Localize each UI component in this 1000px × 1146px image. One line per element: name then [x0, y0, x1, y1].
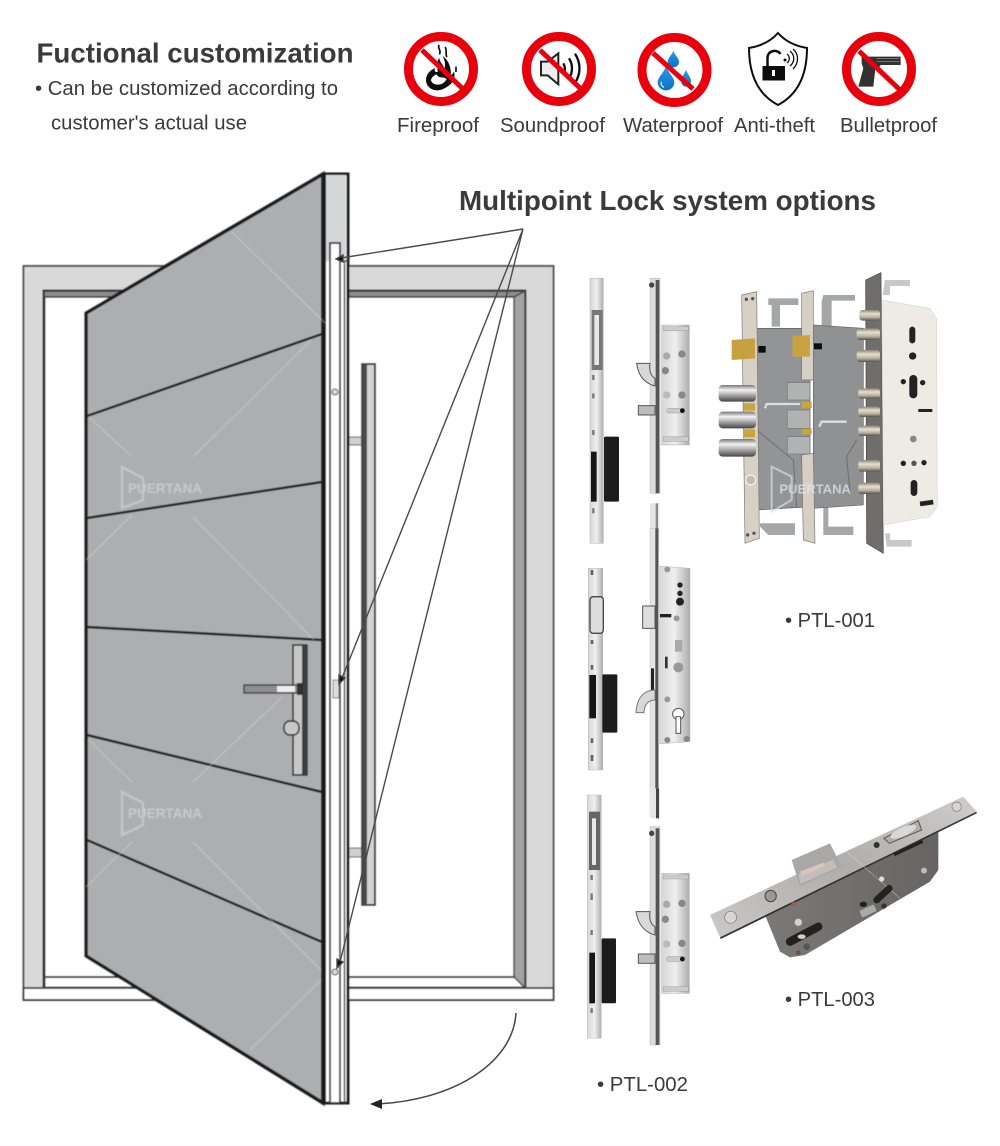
- case cut-outs: [790, 840, 927, 955]
- watermark: PUERTANA: [128, 805, 202, 821]
- latch bolt: [792, 843, 842, 887]
- icon: soundproof: [526, 36, 592, 102]
- forend plate: [710, 797, 977, 939]
- door frame: [24, 266, 554, 1000]
- label: PTL-003: • PTL-003: [785, 989, 875, 1011]
- lock PTL-002 mechanism A: [637, 278, 689, 550]
- lock PTL-003 photo: [710, 797, 977, 957]
- door edge with lock strip: [323, 174, 348, 1103]
- label: soundproof: Soundproof: [500, 115, 605, 137]
- rear lock body: [757, 295, 863, 535]
- watermark: PUERTANA: [779, 481, 851, 496]
- lock case: [765, 830, 938, 957]
- chrome bolts: [719, 385, 756, 457]
- watermark: PUERTANA: [128, 480, 202, 496]
- door lever handle: [244, 645, 307, 775]
- door panel grooves: [87, 334, 322, 942]
- lock PTL-002 strip A: [590, 278, 619, 543]
- arrow: door swing direction: [370, 1013, 516, 1109]
- lock PTL-002 strip C: [587, 795, 616, 1038]
- pull handle bar: [349, 364, 375, 905]
- icon: fireproof: [408, 36, 474, 102]
- label: PTL-002: • PTL-002: [597, 1074, 688, 1096]
- lock PTL-002 strip B: [588, 568, 617, 770]
- callout arrows to lock points: [336, 229, 523, 968]
- watermark: [772, 467, 851, 512]
- square bolts: [787, 383, 810, 454]
- label: bulletproof: Bulletproof: [840, 115, 937, 137]
- customization description: [35, 78, 338, 134]
- heading: functional customization: Fuctional customization: [36, 38, 354, 68]
- customization description: • Can be customized according to: [35, 78, 338, 100]
- icon: anti-theft shield: [749, 33, 807, 105]
- heading: functional customization: [35, 38, 354, 134]
- icon: waterproof: [642, 38, 707, 102]
- brass blocks: [732, 335, 812, 437]
- lock PTL-002 mechanism C: [636, 788, 689, 1045]
- customization description: customer's actual use: [51, 112, 247, 134]
- icon: bulletproof: [846, 36, 912, 102]
- label: anti-theft: Anti-theft: [734, 115, 815, 137]
- lock PTL-002 mechanism B: [636, 528, 690, 815]
- diagram: open door in frame: [24, 174, 554, 1103]
- faceplates: [742, 291, 815, 543]
- lock PTL-001 photo: [719, 273, 937, 553]
- label: PTL-001: • PTL-001: [785, 610, 875, 632]
- heading: multipoint lock system: Multipoint Lock system options: [459, 185, 876, 216]
- white cover plate: [882, 280, 937, 547]
- dark faceplate and round bolts: [857, 273, 883, 553]
- watermark: [86, 232, 325, 1050]
- label: fireproof: Fireproof: [397, 115, 479, 137]
- label: waterproof: Waterproof: [623, 115, 723, 137]
- door leaf: [86, 174, 323, 1103]
